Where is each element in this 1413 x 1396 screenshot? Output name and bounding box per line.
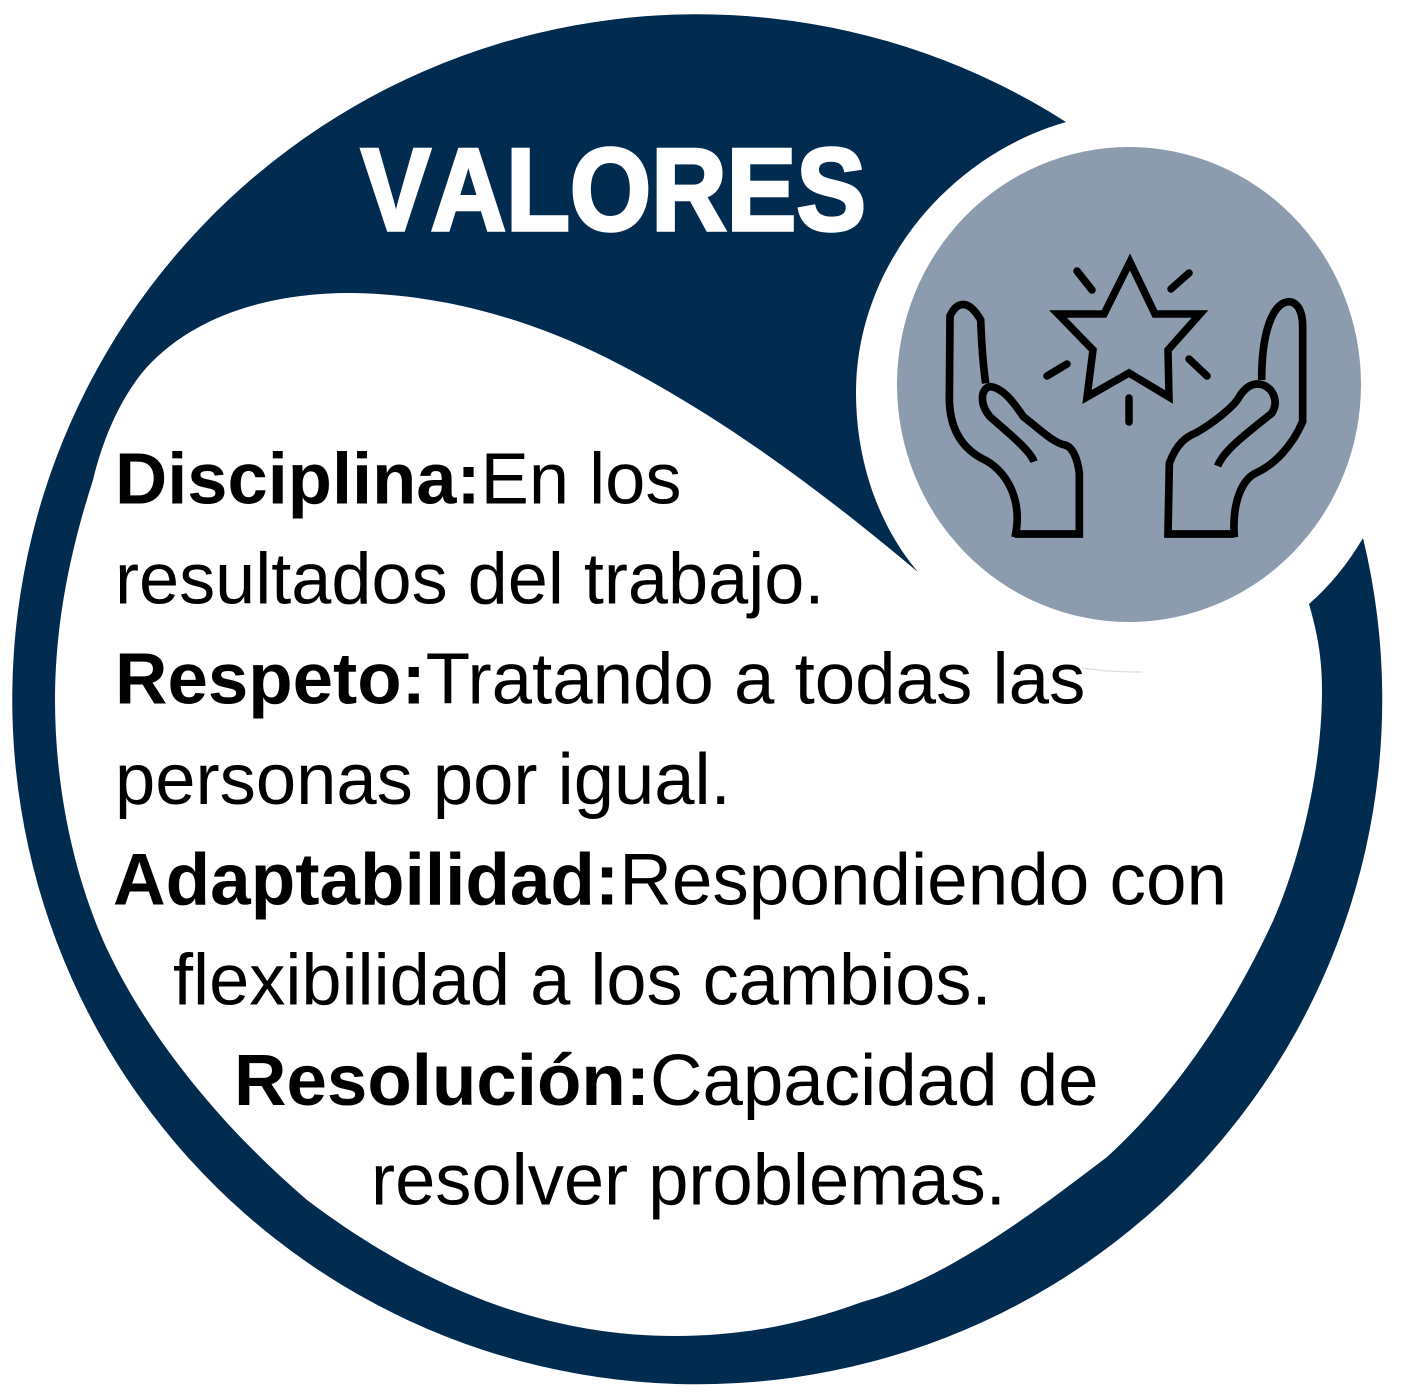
text block: Resolución — [234, 1040, 1099, 1220]
icon: star — [1058, 262, 1200, 397]
heading: VALORES: VALORES — [361, 124, 866, 255]
text block: Adaptabilidad — [113, 840, 1227, 1020]
text block: Resolución: resolver problemas. — [371, 1140, 1006, 1220]
text block: Respeto: personas por igual. — [115, 739, 731, 820]
text block: Disciplina: Disciplina:En los — [115, 440, 682, 520]
text block: Respeto: Respeto:Tratando a todas las — [115, 638, 1085, 720]
text block: Disciplina — [115, 440, 824, 620]
icon background circle — [897, 147, 1361, 622]
icon: star rays — [1047, 271, 1207, 422]
text block: Respeto — [115, 638, 1085, 820]
text block: Adaptabilidad: Adaptabilidad:Respondiendo con — [113, 840, 1227, 920]
text block: Resolución: Resolución:Capacidad de — [234, 1040, 1099, 1121]
icon: left hand — [949, 304, 1079, 537]
text block: Adaptabilidad: flexibilidad a los cambios. — [173, 940, 992, 1020]
text block: Disciplina: resultados del trabajo. — [115, 540, 824, 620]
icon: hands holding star — [897, 147, 1361, 622]
icon: right hand — [1168, 302, 1303, 537]
